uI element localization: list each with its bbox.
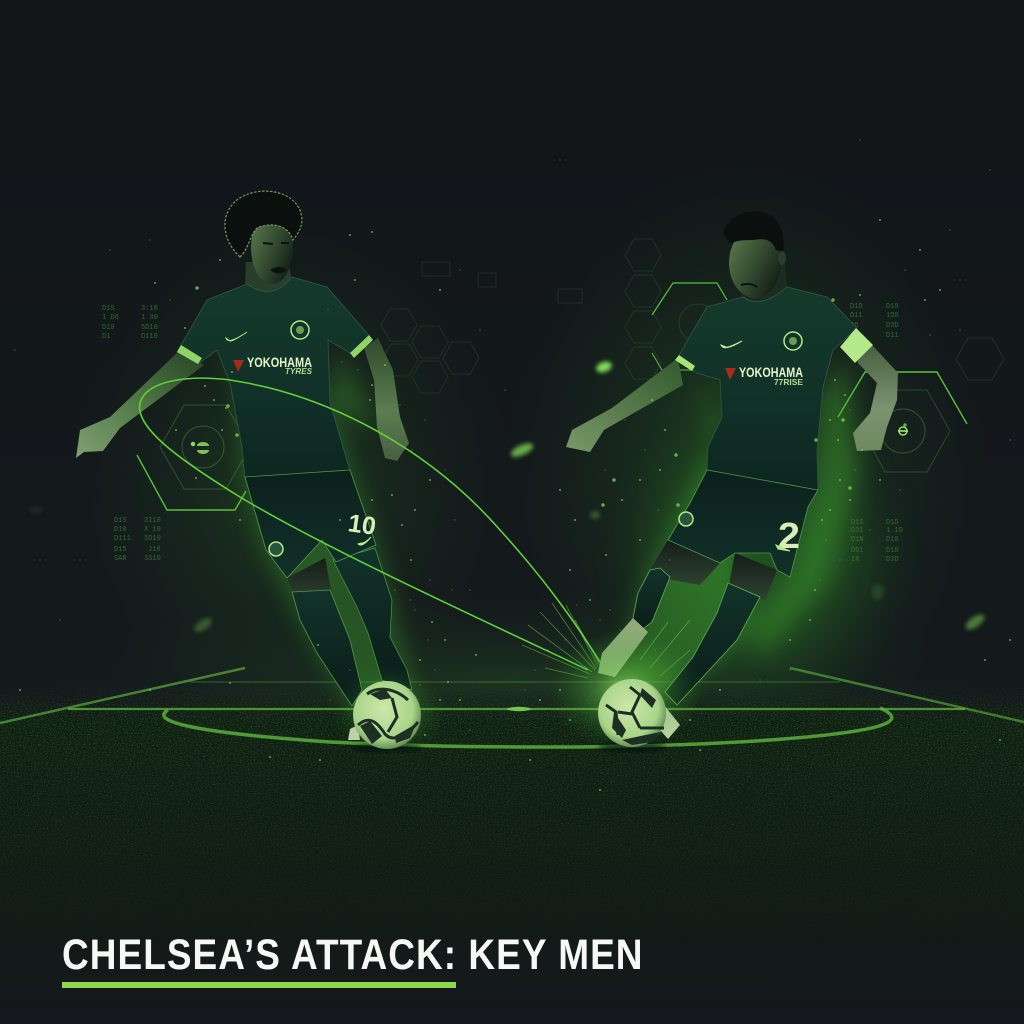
data readout, lower right: D1D <box>886 519 899 527</box>
data readout, lower left: D111 <box>114 535 131 543</box>
left player sponsor line two: TYRES <box>285 366 312 376</box>
data readout, lower right: D18 <box>886 536 899 544</box>
right player glow <box>615 360 860 700</box>
left player crest <box>291 321 309 339</box>
data readout, upper right: D1D <box>850 303 863 311</box>
right player sponsor: YOKOHAMA <box>739 365 803 380</box>
data readout, lower right: D18 <box>886 547 899 555</box>
right player front leg <box>598 540 720 739</box>
data readout, lower left: D15 <box>114 546 127 554</box>
sparks and particles <box>15 140 1010 790</box>
data readout, lower left: D10 <box>114 526 127 534</box>
data readout, upper left: 3:18 <box>141 305 158 313</box>
data readout, upper left <box>102 305 158 341</box>
left player shorts number: 10 <box>346 509 378 541</box>
data readout, lower left: 3S10 <box>144 555 161 563</box>
left player glow <box>215 350 412 705</box>
data readout, upper right: D11 <box>850 312 863 320</box>
data readout, lower left: D1S <box>114 517 127 525</box>
right player back leg <box>665 553 777 705</box>
data readout, upper right <box>850 303 899 340</box>
ambient glow behind players <box>40 160 985 780</box>
right player sponsor line two: 77RISE <box>774 377 803 387</box>
right player armband <box>840 328 873 363</box>
data readout, upper left: 1 30 <box>141 314 158 322</box>
left player back leg <box>333 548 412 690</box>
right player head <box>723 211 787 310</box>
right player shirt <box>678 287 857 490</box>
left player sponsor: YOKOHAMA <box>247 355 312 370</box>
target hexagon, right player <box>652 283 967 472</box>
pass trajectory curve <box>139 378 600 670</box>
right football <box>598 679 666 751</box>
data readout, lower right: D3D <box>886 556 899 564</box>
data readout, lower right: 1 1D <box>886 527 903 535</box>
left player shorts crest <box>269 542 283 556</box>
target hexagon, left player <box>137 366 250 510</box>
ball glows <box>332 630 703 760</box>
left player sleeve cuffs <box>177 335 373 364</box>
data readout, upper left: D1 <box>102 333 110 341</box>
left player <box>76 191 412 740</box>
title underline <box>62 982 456 988</box>
data readout, lower right: D1S <box>851 519 864 527</box>
left player shirt <box>177 277 372 482</box>
data readout, lower left <box>114 517 161 563</box>
data readout, upper left: D10 <box>102 324 115 332</box>
data readout, lower right: D31 <box>851 527 864 535</box>
data readout, upper right: D18 <box>886 303 899 311</box>
data readout, lower right: DD1 <box>851 547 864 555</box>
blurred floating particles <box>29 360 987 635</box>
data readout, upper left: D110 <box>141 333 158 341</box>
right player shorts number: 2 <box>778 515 800 556</box>
tech hexagons, right group <box>625 239 1004 380</box>
data readout, upper left: 1 D6 <box>102 314 119 322</box>
left player shorts swoosh <box>358 537 371 545</box>
right player swoosh <box>721 341 742 348</box>
left football <box>353 681 421 752</box>
right player sleeve cuff <box>675 355 695 371</box>
data readout, lower left: J10 <box>148 546 161 554</box>
data readout, lower right <box>851 519 903 564</box>
right player wide glow <box>650 450 870 670</box>
right player sponsor logo <box>725 368 736 380</box>
data readout, upper right: D11 <box>886 332 899 340</box>
data readout, upper right: DD <box>850 322 858 330</box>
data readout, lower right: D1N <box>851 536 864 544</box>
title: CHELSEA’S ATTACK: KEY MEN <box>62 931 643 979</box>
left player head <box>225 191 302 308</box>
data readout, lower left: X 10 <box>144 526 161 534</box>
data readout, lower right: IR <box>851 556 860 564</box>
left player arms <box>76 338 409 461</box>
left player shorts <box>245 470 376 578</box>
tech hexagons, left group <box>381 262 582 393</box>
left player sponsor logo <box>233 360 244 372</box>
right player shorts crest <box>679 512 693 526</box>
data readout, lower left: 3I10 <box>144 517 161 525</box>
right player <box>566 211 898 739</box>
left player front leg <box>287 558 362 740</box>
data readout, lower left: SAR <box>114 555 127 563</box>
pitch markings <box>0 668 1024 747</box>
impact burst rays <box>522 603 690 678</box>
data readout, upper right: D3D <box>886 322 899 330</box>
left player swoosh <box>226 332 247 341</box>
right player shorts swoosh <box>776 545 790 551</box>
data readout, upper left: D1S <box>102 305 115 313</box>
data readout, upper left: 5D10 <box>141 324 158 332</box>
right player crest <box>784 332 802 350</box>
right player arms <box>566 345 898 452</box>
right player shorts <box>668 470 818 577</box>
pitch surface <box>0 686 1024 926</box>
data readout, lower left: 5D10 <box>144 535 161 543</box>
data readout, upper right: 1D8 <box>886 312 899 320</box>
